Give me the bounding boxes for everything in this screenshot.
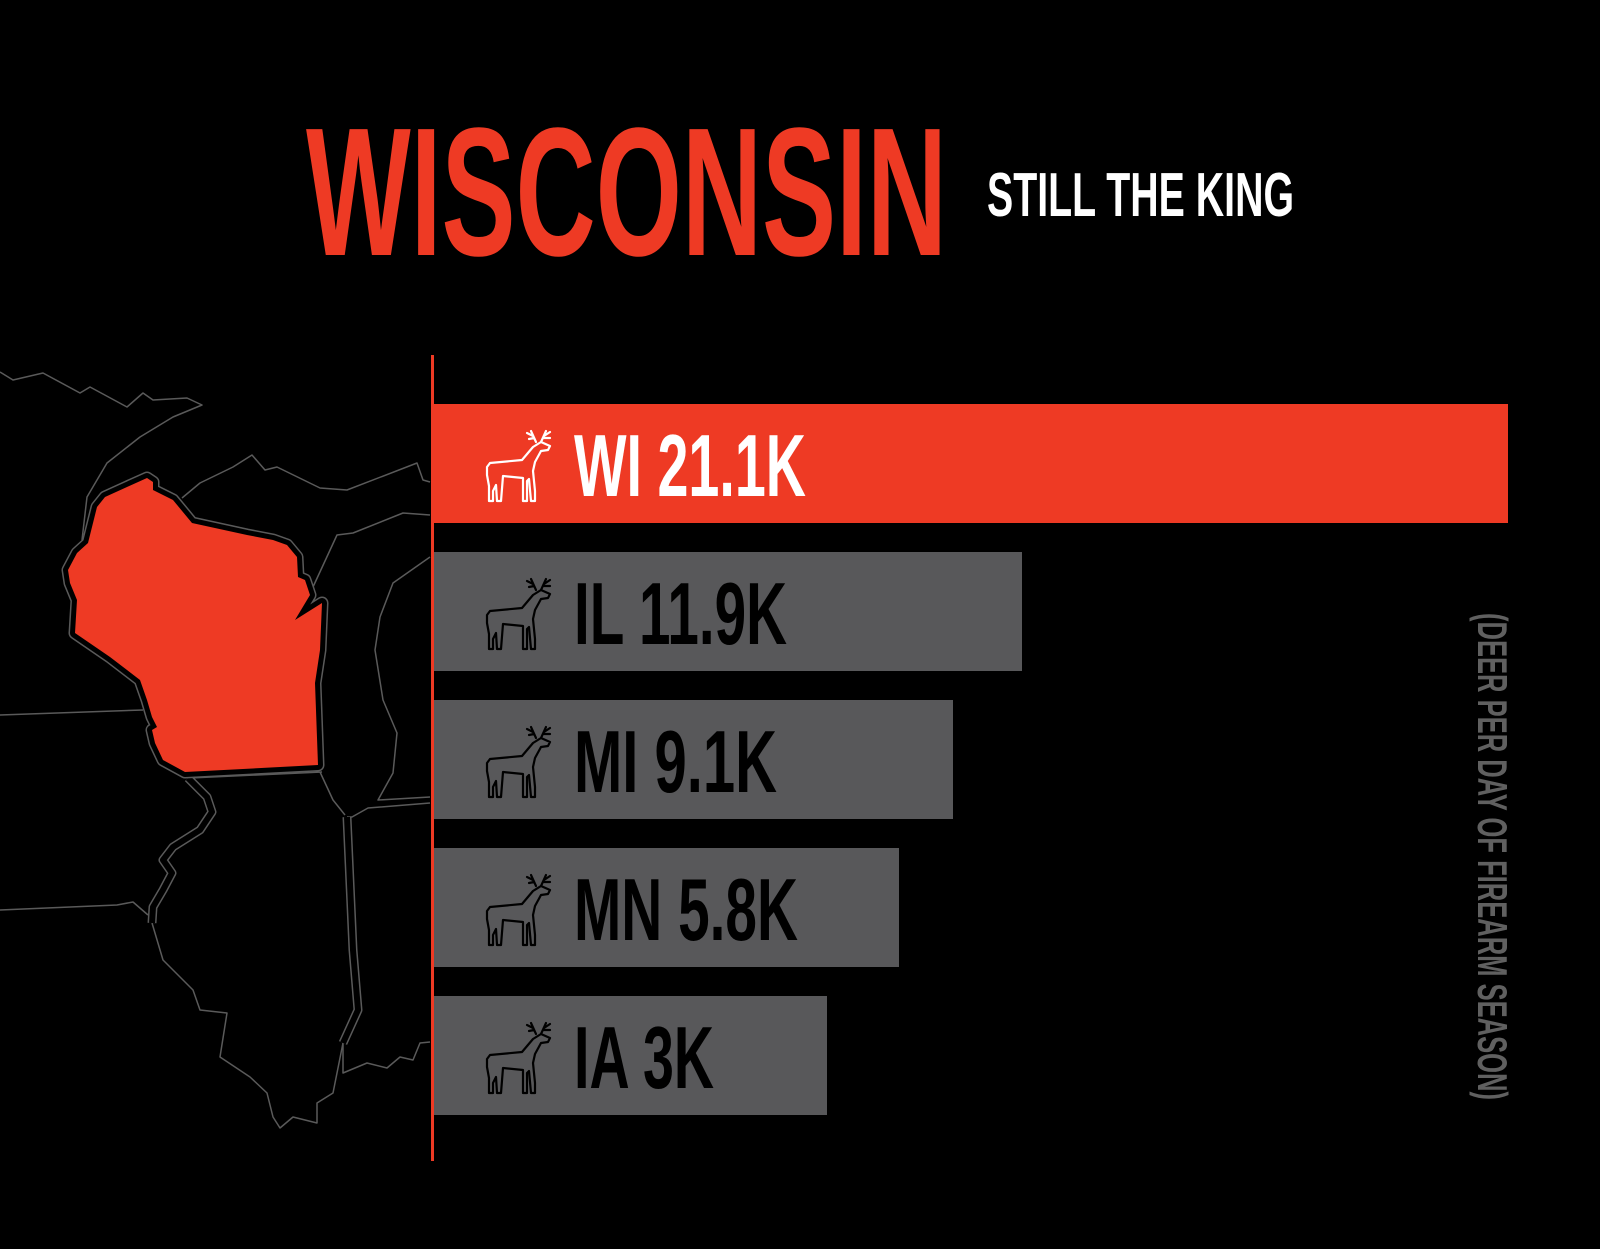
axis line xyxy=(431,355,434,1161)
bar: WI xyxy=(434,404,1508,523)
bar: MN xyxy=(434,848,899,967)
bar: MI xyxy=(434,700,953,819)
title: WISCONSIN xyxy=(306,89,947,294)
bar: IA: IA 3K xyxy=(574,1008,714,1107)
bar: IL xyxy=(434,552,1022,671)
bar: WI: WI 21.1K xyxy=(574,416,806,515)
icon: deer xyxy=(487,431,550,501)
icon: deer xyxy=(487,875,550,945)
bar: MN: MN 5.8K xyxy=(574,860,798,959)
subtitle: STILL THE KING xyxy=(987,161,1294,230)
map xyxy=(0,372,430,1128)
bar: IA xyxy=(434,996,827,1115)
wisconsin xyxy=(68,478,322,772)
icon: deer xyxy=(487,1023,550,1093)
bar: MI: MI 9.1K xyxy=(574,712,777,811)
icon: deer xyxy=(487,727,550,797)
bar: IL: IL 11.9K xyxy=(574,564,787,663)
icon: deer xyxy=(487,579,550,649)
